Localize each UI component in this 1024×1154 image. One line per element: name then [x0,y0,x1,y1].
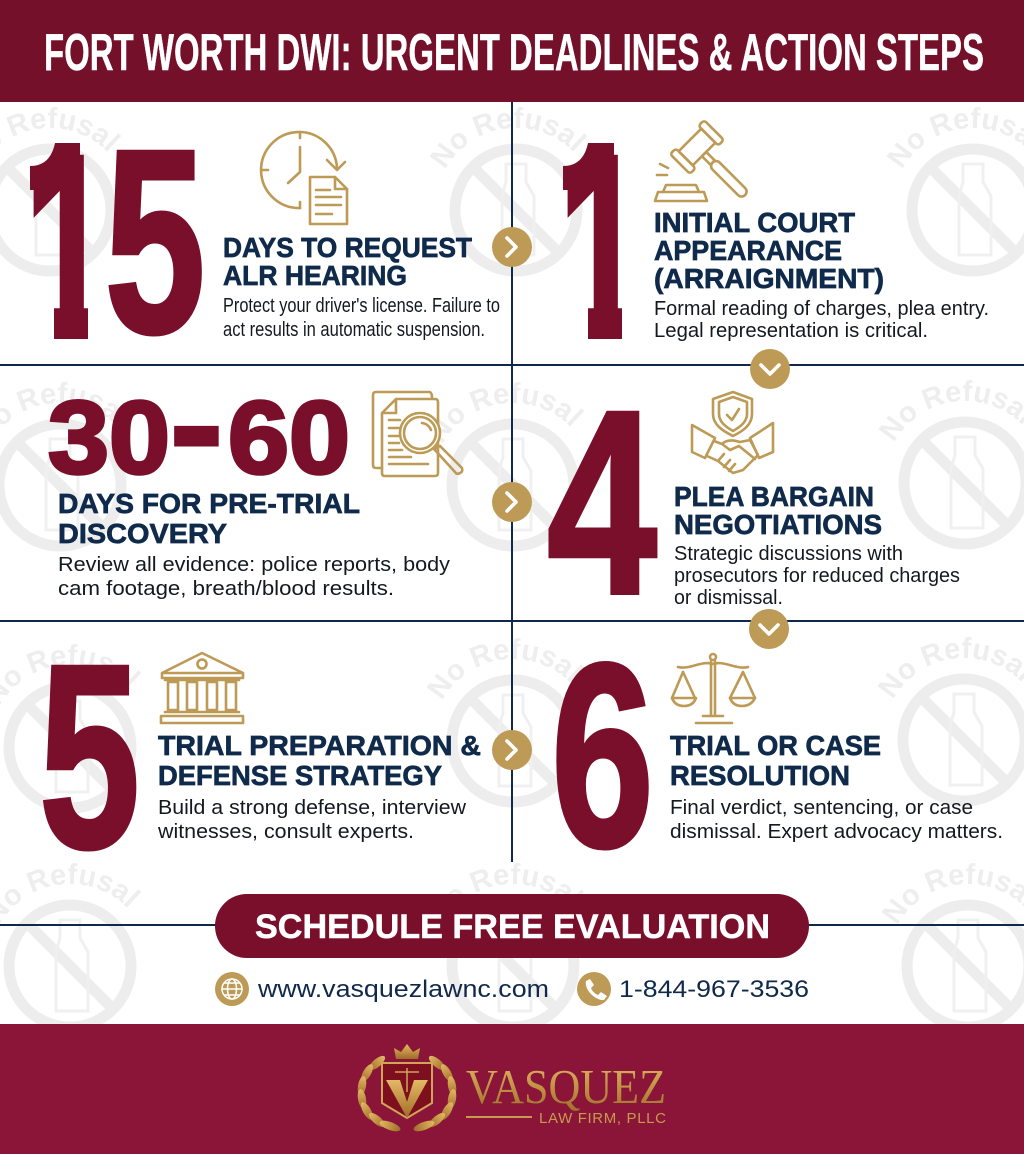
big number 15 [30,143,202,339]
header banner [0,0,1024,102]
heading: DISCOVERY [58,518,227,549]
body text: witnesses, consult experts. [157,821,414,843]
body text [223,295,500,341]
body text: Strategic discussions with [674,543,903,565]
body text: dismissal. Expert advocacy matters. [670,821,1003,843]
heading: TRIAL PREPARATION & [158,730,481,761]
website contact: www.vasquezlawnc.com [257,976,549,1003]
logo emblem [356,1044,458,1134]
heading: RESOLUTION [670,760,850,791]
watermarks: no refusal: No Refusal [426,638,584,699]
logo wordmark: VASQUEZ [466,1059,666,1114]
arrow: right chevron row 2 [492,482,532,522]
body text [674,543,960,609]
body text: Build a strong defense, interview [158,797,467,819]
body text: cam footage, breath/blood results. [58,578,394,600]
watermarks: no refusal: No Refusal [448,863,584,894]
watermarks: no refusal: No Refusal [430,107,587,168]
heading [654,207,884,294]
heading: INITIAL COURT [654,207,855,238]
big number 30-60: - [168,330,225,514]
heading: NEGOTIATIONS [674,509,882,540]
body text [58,554,450,600]
body text: or dismissal. [674,587,783,609]
body text [654,298,989,342]
body text: act results in automatic suspension. [223,319,485,341]
heading [158,730,481,791]
big number 1 [563,143,622,339]
body text: Review all evidence: police reports, body [58,554,450,576]
icon: courthouse [161,653,243,723]
icon: documents with magnifier [373,392,462,476]
panel: 6 trial or resolution [551,609,1003,902]
heading [58,488,360,549]
panel: 5 trial preparation [39,610,481,903]
heading [223,232,472,291]
arrow: down chevron to trial [749,609,789,649]
panel: 15 days ALR hearing [30,130,500,340]
phone contact: 1-844-967-3536 [619,976,809,1003]
icon: shield and handshake [692,392,773,473]
big number 30-60 [48,330,350,514]
body text: Final verdict, sentencing, or case [670,797,973,819]
logo wordmark: LAW FIRM, PLLC [539,1110,666,1127]
heading: TRIAL OR CASE [670,730,881,761]
big number 4: 4 [547,356,658,649]
panel: 30-60 days discovery [48,330,462,600]
heading [674,481,882,540]
heading: PLEA BARGAIN [674,481,874,512]
arrow: right chevron row 3 [492,730,532,770]
arrow: right chevron row 1 [492,227,532,267]
big number 30-60: 60 [228,380,350,495]
big number 6: 6 [551,609,654,902]
arrow: down chevron to plea bargain [750,349,790,389]
grid dividers [0,102,1024,925]
heading: (ARRAIGNMENT) [654,263,884,294]
icon: scales of justice [672,654,755,723]
watermarks: no refusal: No Refusal [436,382,584,443]
icon: gavel [655,120,762,212]
phone contact [577,972,809,1006]
heading: DEFENSE STRATEGY [158,760,442,791]
panel: 4 plea bargain [547,356,960,649]
wreath [356,1054,458,1134]
big number 1: 1 [558,100,646,393]
icon: clock and document [261,132,347,224]
body text: Legal representation is critical. [654,320,928,342]
big number 15: 5 [104,95,206,388]
body text [157,797,467,843]
heading: DAYS FOR PRE-TRIAL [58,488,360,519]
call to action button [215,894,809,958]
call to action button: SCHEDULE FREE EVALUATION [255,908,770,946]
panel: 1 arraignment [563,120,988,341]
big number 5: 5 [39,610,140,903]
website contact [215,972,549,1006]
heading: APPEARANCE [654,235,842,266]
big number 30-60: 30 [48,380,170,495]
heading [670,730,881,791]
body text: Formal reading of charges, plea entry. [654,298,989,320]
body text: prosecutors for reduced charges [674,565,960,587]
crown [394,1044,420,1059]
body text [670,797,1003,843]
footer band [0,1024,1024,1154]
icon: globe [215,972,249,1006]
shield [382,1063,432,1118]
icon: phone [577,972,611,1006]
big number 15: 1 [24,100,112,393]
heading: DAYS TO REQUEST [223,232,472,263]
heading: ALR HEARING [223,260,407,291]
body text: Protect your driver's license. Failure to [223,295,500,317]
